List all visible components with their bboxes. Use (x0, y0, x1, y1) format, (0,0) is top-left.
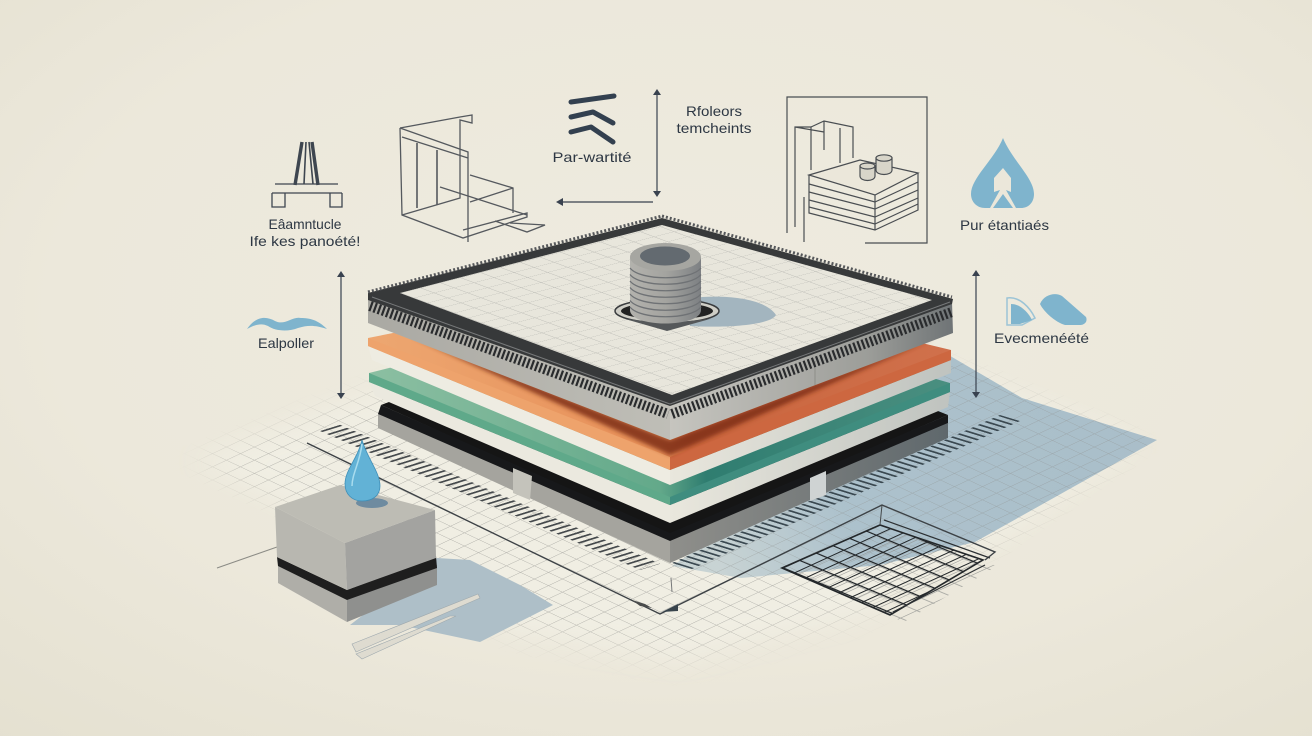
hatching: right floor band (672, 415, 1020, 569)
slab top surface (400, 225, 932, 395)
drain pipe (615, 243, 719, 331)
label: Par-wartité: Par-wartité (552, 149, 632, 165)
label: Eâamntucle (250, 216, 360, 249)
wire mesh (782, 505, 997, 622)
label: Eâamntucle: Eâamntucle (268, 216, 342, 232)
paper strips (352, 594, 480, 652)
arrow: vertical top (653, 89, 661, 197)
icon: structure sketch (400, 115, 545, 242)
floor grid (196, 361, 1140, 673)
pipe shadow (690, 297, 776, 327)
label: Pur étantiaés: Pur étantiaés (960, 217, 1049, 233)
layer: orange insulation (368, 280, 951, 485)
layer: concrete base (378, 300, 948, 563)
label: Eâamntucle: Ife kes panoété! (250, 233, 360, 249)
arrow: horizontal (556, 198, 653, 206)
concrete sample block (275, 485, 553, 659)
water drop (345, 440, 388, 508)
slab rebar rim (368, 218, 953, 406)
label: Rfoleors temcheints: temcheints (676, 120, 752, 136)
slab sides (368, 296, 670, 440)
icon: blue shapes (1007, 294, 1087, 325)
icon: tripod (272, 142, 342, 207)
rebar teeth (368, 216, 952, 414)
label: Ealpoller: Ealpoller (258, 335, 314, 351)
floor outline lines (217, 443, 995, 614)
icon: blue drop with arrow (971, 138, 1034, 208)
icon: chevrons (571, 96, 614, 142)
label: Rfoleors temcheints (676, 103, 752, 136)
layer: top slab (368, 216, 953, 440)
label: Evecmenéété: Evecmenéété (994, 330, 1089, 346)
layer: green insulation (369, 300, 950, 523)
label: Rfoleors temcheints: Rfoleors (686, 103, 742, 119)
hatching: left floor band (320, 425, 660, 570)
block shadow (350, 558, 553, 642)
arrow: vertical right (972, 270, 980, 398)
floor shadow of the stack (672, 350, 1157, 578)
arrow: vertical left (337, 271, 345, 399)
icon: wave (247, 318, 327, 330)
icon: framed material stack (787, 97, 927, 243)
